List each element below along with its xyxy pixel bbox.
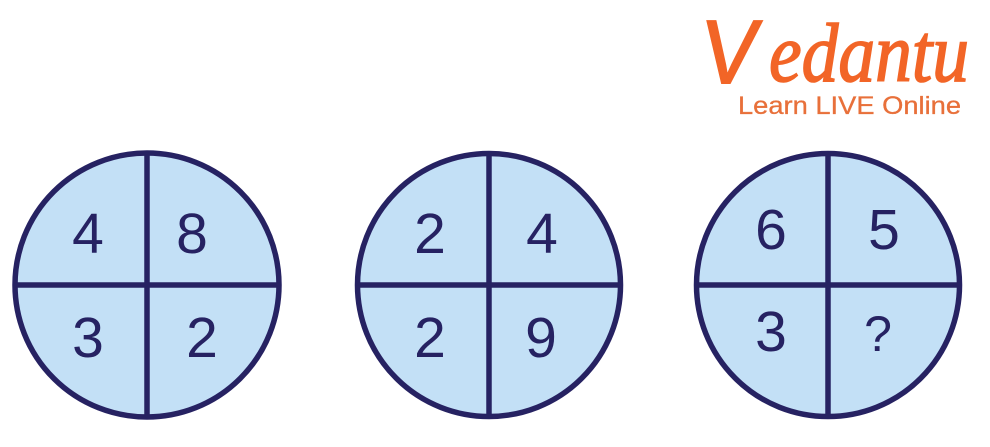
number 2: 2 [414, 306, 446, 370]
question mark: ? [864, 306, 892, 362]
number 8: 8 [176, 202, 208, 266]
circle 3 [696, 154, 960, 416]
number 3: 3 [72, 306, 104, 370]
circle 2 [358, 154, 620, 416]
number 5: 5 [868, 198, 900, 262]
number 4: 4 [72, 202, 104, 266]
number 3: 3 [755, 300, 787, 364]
logo tagline: Learn LIVE Online [738, 92, 961, 120]
number 2: 2 [186, 306, 218, 370]
number 6: 6 [755, 198, 787, 262]
logo wordmark: V [696, 2, 765, 103]
circle 1 [15, 153, 279, 417]
number 2: 2 [414, 202, 446, 266]
logo: Vedantu [696, 2, 969, 120]
number 9: 9 [525, 306, 557, 370]
number 4: 4 [526, 202, 558, 266]
logo wordmark [696, 2, 969, 103]
